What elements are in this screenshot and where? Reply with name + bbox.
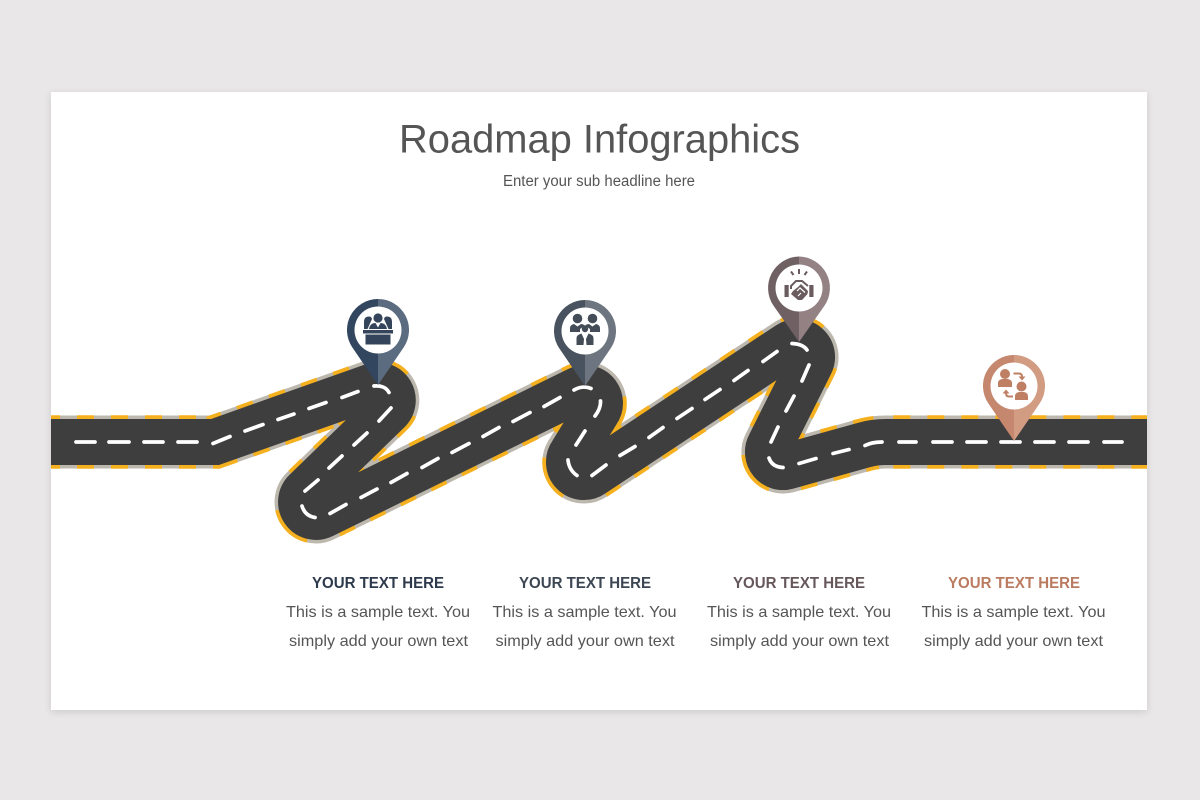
- step 1 text: simply add your own text: [289, 633, 469, 650]
- pin 2: team: [554, 300, 616, 386]
- step 3 text: YOUR TEXT HERE: [733, 575, 865, 592]
- title: Roadmap Infographics: [399, 118, 800, 162]
- road centre dashes: [76, 344, 1122, 518]
- step 2 text: YOUR TEXT HERE: [519, 575, 651, 592]
- icon: handshake: [784, 269, 814, 300]
- step 2 text: This is a sample text. You: [492, 604, 676, 621]
- icon: three people: [570, 314, 600, 345]
- step 1 text: This is a sample text. You: [286, 604, 470, 621]
- road: [40, 342, 1160, 518]
- step 4 text: [922, 575, 1106, 650]
- step 3 text: [707, 575, 891, 650]
- step 2 text: simply add your own text: [496, 633, 675, 650]
- step 1 text: [286, 575, 470, 650]
- step 4 text: simply add your own text: [924, 633, 1104, 650]
- pin 3: handshake: [768, 256, 830, 342]
- background card: [51, 92, 1147, 712]
- step 4 text: YOUR TEXT HERE: [948, 575, 1080, 592]
- icon: two people exchanging: [998, 369, 1028, 400]
- step 3 text: simply add your own text: [710, 633, 890, 650]
- step 3 text: This is a sample text. You: [707, 604, 891, 621]
- pin 1: podium: [347, 299, 409, 385]
- step 4 text: This is a sample text. You: [922, 604, 1106, 621]
- subtitle: Enter your sub headline here: [503, 173, 695, 190]
- icon: podium with speakers: [363, 313, 393, 344]
- step 1 text: YOUR TEXT HERE: [312, 575, 444, 592]
- pin 4: exchange: [983, 355, 1045, 441]
- step 2 text: [492, 575, 676, 650]
